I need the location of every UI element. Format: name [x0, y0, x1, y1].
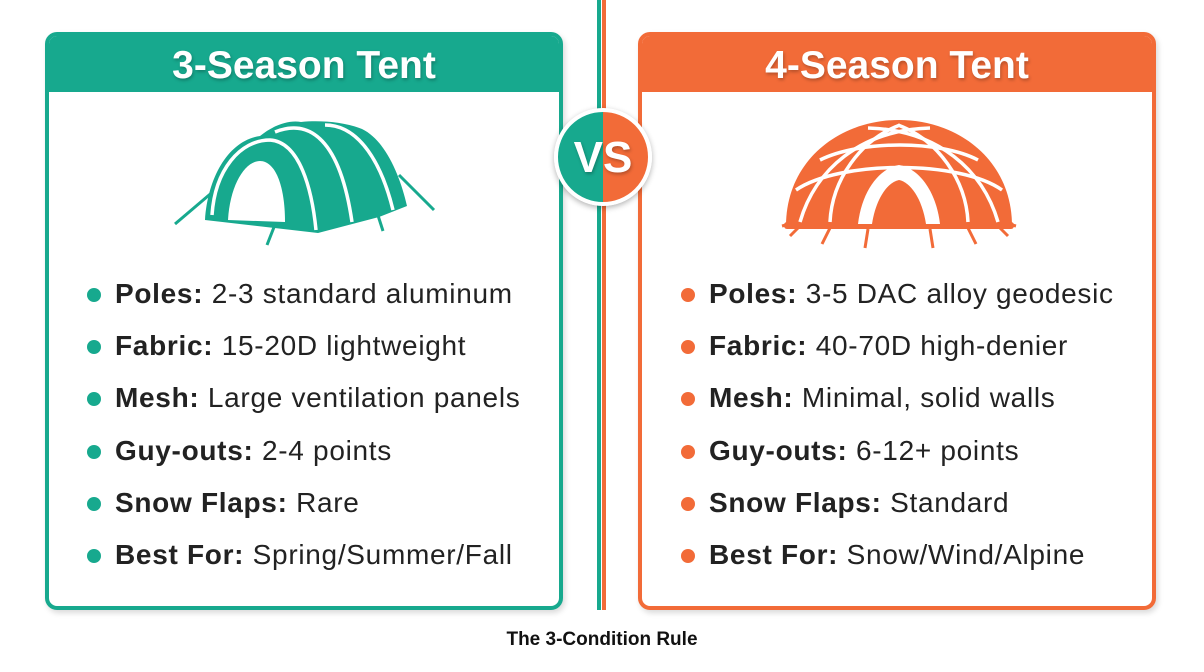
item: fabric: Fabric: 40-70D high-denier: [709, 330, 1068, 361]
icon: tunnel tent: [174, 121, 435, 246]
heading: 4-Season Tent: [642, 36, 1152, 92]
heading: 3-Season Tent: 3-Season Tent: [172, 44, 436, 87]
panel: 3-season: [45, 32, 563, 610]
item: best for: Best For: Snow/Wind/Alpine: [709, 539, 1085, 570]
center divider: [597, 0, 601, 610]
item: fabric: Fabric: 15-20D lightweight: [115, 330, 466, 361]
panel: 4-season: [638, 32, 1156, 610]
item: snow flaps: Snow Flaps: Standard: [709, 487, 1009, 518]
VS badge: VS: [574, 133, 632, 182]
list: 3-season specs: [87, 278, 520, 570]
VS badge: [554, 108, 652, 206]
icon: dome tent: [782, 120, 1016, 248]
item: best for: Best For: Spring/Summer/Fall: [115, 539, 513, 570]
item: poles: Poles: 2-3 standard aluminum: [115, 278, 513, 309]
footer caption: The 3-Condition Rule: [506, 629, 698, 650]
list: 4-season specs: [681, 278, 1114, 570]
item: snow flaps: Snow Flaps: Rare: [115, 487, 360, 518]
heading: 3-Season Tent: [49, 36, 559, 92]
item: poles: Poles: 3-5 DAC alloy geodesic: [709, 278, 1114, 309]
item: mesh: Mesh: Minimal, solid walls: [709, 382, 1056, 413]
item: guy-outs: Guy-outs: 2-4 points: [115, 435, 392, 466]
heading: 4-Season Tent: 4-Season Tent: [765, 44, 1029, 87]
item: guy-outs: Guy-outs: 6-12+ points: [709, 435, 1019, 466]
item: mesh: Mesh: Large ventilation panels: [115, 382, 520, 413]
